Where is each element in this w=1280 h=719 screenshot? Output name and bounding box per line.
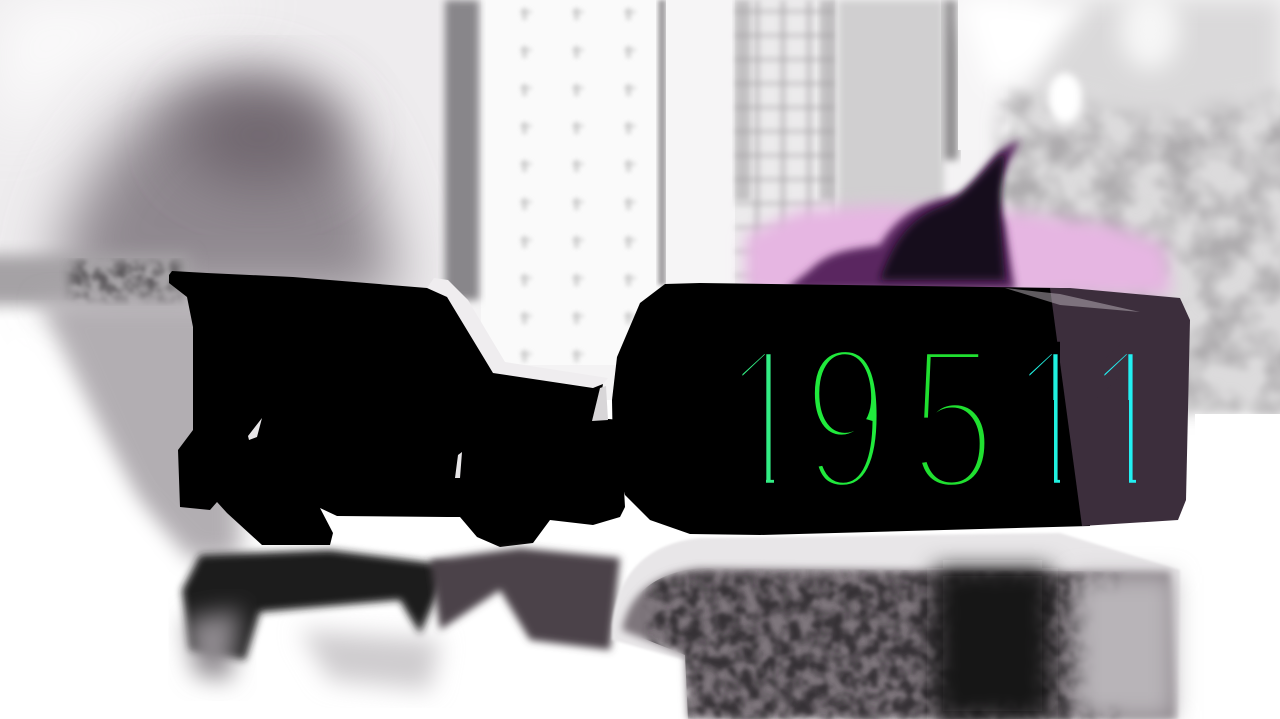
tanker end panel <box>1050 288 1190 526</box>
year counter: 1 <box>1085 305 1171 533</box>
year counter: 5 <box>910 305 996 533</box>
year counter: 9 <box>803 305 889 533</box>
background: building columns <box>445 0 1008 365</box>
reflection of truck <box>182 548 620 690</box>
truck window glints <box>248 418 462 478</box>
tanker top highlight <box>1005 288 1140 312</box>
year counter: 1 <box>723 305 809 533</box>
background: bright cloud top right <box>960 0 1280 719</box>
year counter <box>742 342 1136 485</box>
year counter: 1 <box>1010 305 1096 533</box>
toy dump truck silhouette <box>169 271 625 547</box>
dark purple smoke <box>785 140 1020 290</box>
reflection of tanker <box>612 533 1180 719</box>
pink haze behind smoke <box>745 205 1172 295</box>
background: dark blurred shape on left <box>0 0 400 719</box>
toy tanker body <box>612 283 1090 535</box>
truck cab highlight <box>427 278 608 388</box>
truck hitch highlight <box>592 386 608 421</box>
